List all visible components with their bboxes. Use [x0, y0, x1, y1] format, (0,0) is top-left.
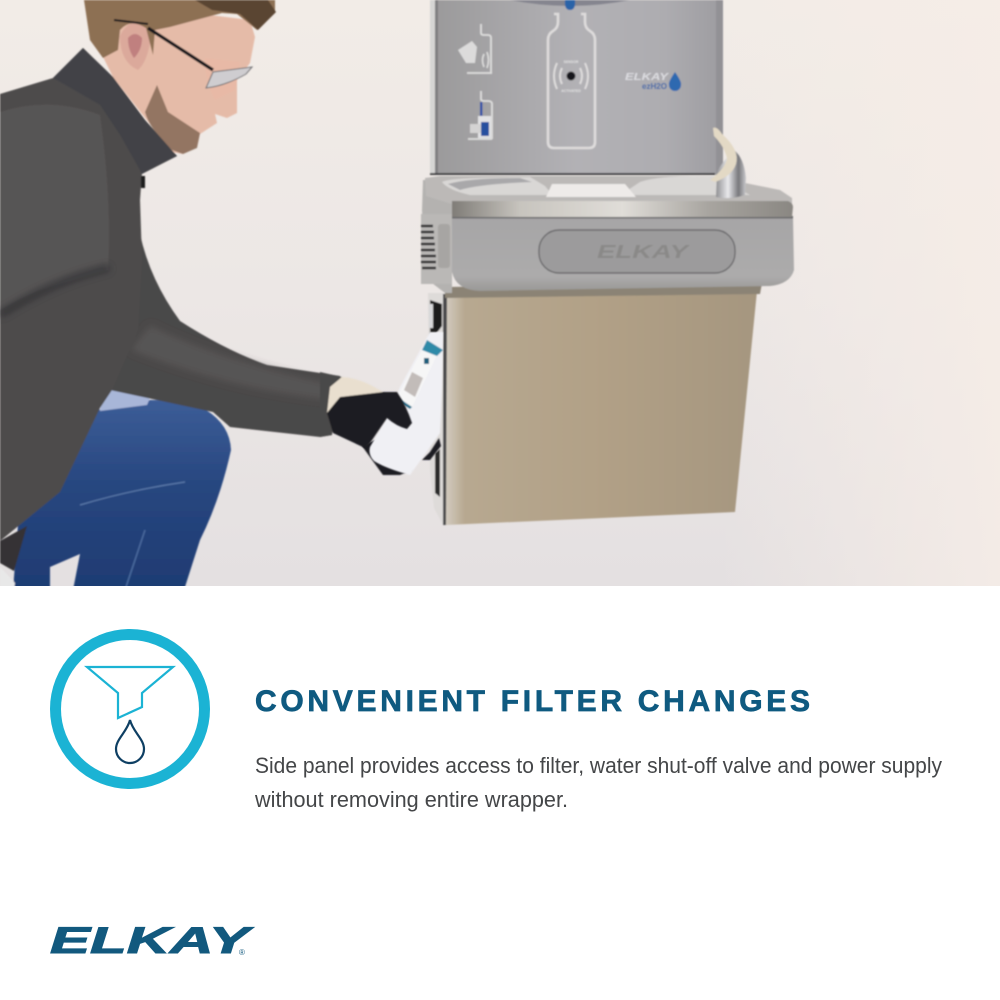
nameplate with brand — [539, 230, 735, 273]
water drop — [116, 720, 144, 763]
neck and face — [103, 10, 255, 154]
sleeve — [110, 234, 340, 437]
icon: filter funnel and water drop — [56, 634, 204, 784]
back panel — [430, 0, 723, 175]
photo: man installing a filter in a bottle-filling drinking fountain — [0, 0, 1000, 590]
filter label — [395, 340, 443, 409]
bottle graphic: SENSOR — [564, 60, 579, 64]
man — [0, 0, 412, 590]
side opening wall — [428, 293, 448, 525]
nameplate with brand: ELKAY — [597, 242, 691, 262]
hair — [84, 0, 276, 58]
icon: bottle filling — [468, 91, 492, 139]
logo: Elkay wordmark — [50, 920, 254, 961]
faucet and bubbler — [710, 128, 746, 198]
bottle graphic — [548, 14, 595, 148]
fountain panel logo: ELKAY — [625, 72, 670, 83]
funnel — [87, 667, 173, 718]
logo: Elkay wordmark: ® — [239, 948, 245, 957]
shoe edge — [0, 567, 15, 590]
stainless cabinet — [445, 283, 762, 525]
dispenser nozzle — [510, 0, 630, 10]
fountain panel logo: ezH2O — [642, 82, 667, 91]
basin body — [452, 216, 794, 291]
gloved hand — [327, 377, 412, 448]
jacket cuff — [320, 372, 342, 437]
body text: without removing entire wrapper. — [254, 787, 568, 812]
body text — [254, 753, 942, 812]
drinking fountain — [421, 0, 794, 525]
body text: Side panel provides access to filter, water shut-off valve and power supply — [255, 753, 942, 778]
logo: Elkay wordmark: ELKAY — [50, 920, 254, 961]
bottle graphic: ACTIVATED — [561, 89, 581, 93]
icon: hands free sensor — [458, 24, 492, 73]
jeans — [13, 400, 231, 590]
glasses — [114, 20, 252, 88]
basin deck and bowl — [425, 176, 792, 204]
glove fingers behind the filter — [362, 438, 441, 475]
heading: CONVENIENT FILTER CHANGES — [255, 685, 810, 718]
wall — [0, 0, 1000, 586]
polished rim — [452, 201, 793, 217]
undershirt — [100, 386, 150, 411]
fountain panel logo — [625, 72, 681, 91]
filter cartridge — [370, 332, 443, 475]
basin side housing with vents — [421, 180, 452, 293]
jacket body — [0, 48, 177, 571]
